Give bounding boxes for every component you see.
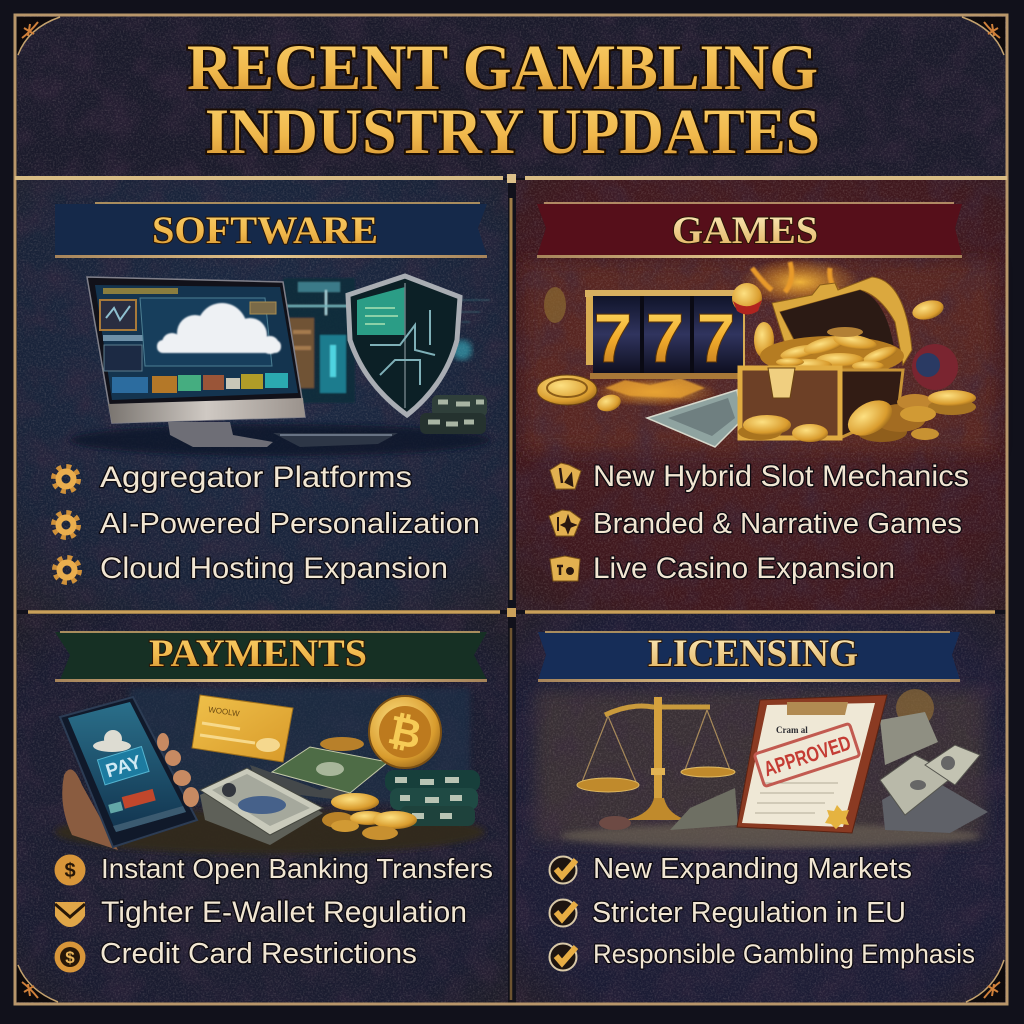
item: stricter regulation in eu: Stricter Regulation in EU [592, 897, 906, 929]
licensing heading: LICENSING [648, 632, 858, 675]
panel: licensing [516, 614, 1007, 1004]
cash pile right [880, 712, 988, 833]
monitor chin [108, 398, 305, 423]
item: new expanding markets: New Expanding Markets [593, 853, 912, 885]
games banner [537, 202, 962, 258]
panel: software [17, 180, 508, 610]
icon: wallet envelope [55, 902, 85, 927]
software heading: SOFTWARE [152, 209, 378, 252]
games list [549, 460, 969, 585]
licensing list [550, 853, 975, 970]
bitcoin coin [369, 696, 441, 768]
slot lever knob [732, 283, 774, 358]
chest gold pile [760, 327, 904, 376]
banknote [647, 390, 742, 447]
title [187, 32, 820, 168]
chest lock [768, 368, 795, 398]
document header: Cram al [776, 725, 808, 735]
money stack [200, 765, 380, 845]
icon: gear [54, 466, 78, 492]
document [742, 703, 875, 827]
item: credit card restrictions: Credit Card Restrictions [100, 938, 417, 970]
games heading: GAMES [672, 209, 818, 252]
cloud [157, 303, 281, 354]
pay button: PAY [103, 752, 144, 782]
illustration: slot machine and treasure chest [537, 258, 976, 447]
clip [787, 702, 848, 715]
slot machine: 7 [697, 299, 735, 377]
item: live casino expansion: Live Casino Expansion [593, 552, 895, 585]
gold card [192, 695, 293, 762]
small coin pile behind bill [320, 737, 364, 751]
title: INDUSTRY UPDATES [205, 96, 820, 168]
item: tighter e-wallet regulation: Tighter E-Wallet Regulation [101, 896, 467, 929]
item: aggregator platforms: Aggregator Platforms [100, 461, 412, 494]
chest front [740, 368, 840, 438]
payments list [54, 853, 493, 972]
item: branded and narrative games: Branded & Narrative Games [593, 508, 962, 540]
item: instant open banking transfers: Instant Open Banking Transfers [101, 853, 493, 884]
left disc [537, 375, 597, 405]
reel sevens: 7 [594, 299, 632, 377]
smartphone [60, 697, 197, 847]
shield [348, 276, 460, 415]
icon: dollar coin [54, 942, 86, 972]
title: RECENT GAMBLING [187, 32, 818, 104]
icon: cards [550, 556, 580, 581]
slot machine [585, 290, 745, 379]
green banknote [272, 747, 388, 793]
item: cloud hosting expansion: Cloud Hosting Expansion [100, 552, 448, 585]
illustration: phone, cards, cash and bitcoin [55, 688, 485, 854]
dim medallion [544, 287, 566, 323]
phone cloud [93, 730, 131, 752]
item: new hybrid slot mechanics: New Hybrid Slot Mechanics [593, 460, 969, 493]
phone small button [107, 789, 156, 814]
icon: dollar coin: $ [65, 948, 75, 967]
clipboard [737, 695, 887, 833]
panel: games [516, 180, 1007, 610]
pay button [97, 747, 149, 785]
payments banner [55, 631, 487, 682]
thumbnails [152, 373, 288, 393]
chest side [840, 370, 903, 438]
icon: cards [549, 510, 581, 536]
data wall behind monitor [283, 278, 490, 403]
hand palm [62, 769, 118, 850]
icon: exchange coin [54, 854, 86, 886]
slot machine: 7 [646, 299, 684, 377]
approved stamp: APPROVED [761, 732, 854, 781]
fingers [157, 733, 199, 807]
monitor body [87, 277, 305, 423]
monitor screen [95, 285, 298, 400]
item: responsible gambling emphasis: Responsible Gambling Emphasis [593, 939, 975, 969]
licensing banner [538, 631, 960, 682]
illustration: scales and approved document [560, 689, 988, 848]
software banner [55, 202, 487, 258]
payments heading: PAYMENTS [149, 632, 367, 675]
icon: gear [54, 558, 80, 582]
illustration: monitor, cloud and shield [70, 276, 490, 456]
poker chips [420, 395, 487, 434]
software list [54, 461, 480, 585]
keyboard [273, 433, 398, 447]
monitor stand [168, 422, 273, 447]
coin pile [322, 793, 417, 840]
item: ai-powered personalization: AI-Powered Personalization [100, 508, 480, 540]
floor glow [593, 377, 717, 407]
bitcoin coin: ₿ [384, 707, 426, 759]
gold card: WOOLW [208, 705, 241, 718]
icon: exchange coin: $ [64, 860, 76, 882]
icon: cards [550, 463, 581, 489]
coin piles [595, 297, 976, 443]
gold seal [825, 805, 849, 829]
icon: check [550, 944, 576, 970]
background coin [896, 689, 934, 727]
icon: check [550, 900, 576, 926]
panel: payments [17, 614, 508, 1004]
scale of justice [577, 697, 735, 820]
small banknotes left [599, 788, 738, 830]
flames [740, 258, 860, 306]
treasure chest lid [772, 277, 912, 365]
chip stack [385, 770, 480, 826]
icon: check [550, 856, 576, 884]
icon: gear [54, 512, 78, 538]
